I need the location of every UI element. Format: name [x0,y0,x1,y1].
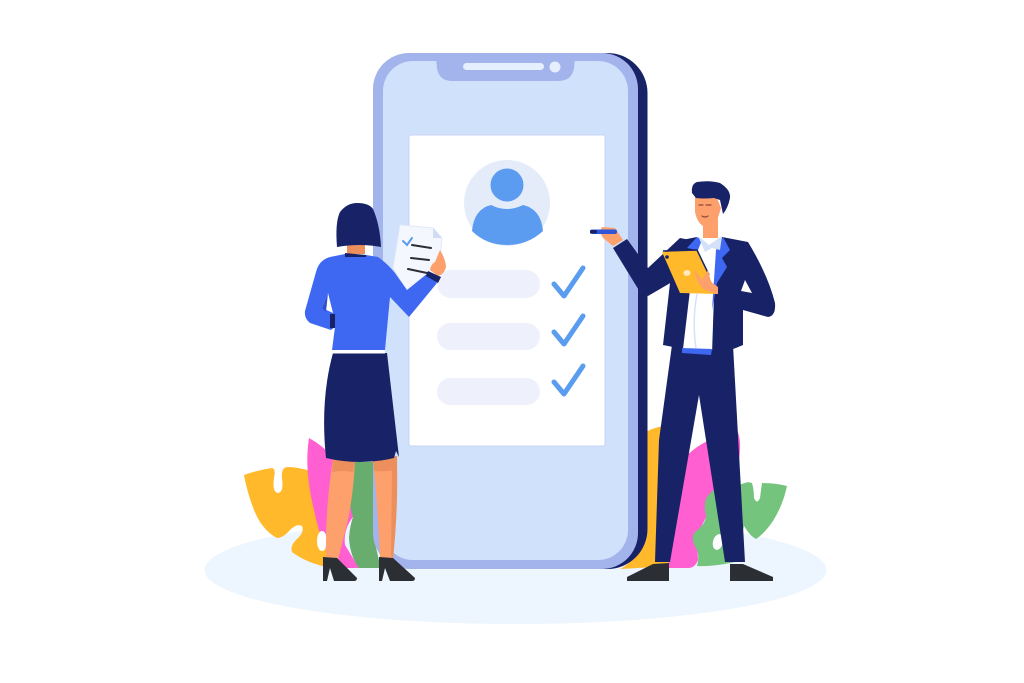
pink leaf right [668,430,740,568]
list row 3 [437,366,583,405]
yellow leaf left [244,467,345,567]
pen tip [590,230,597,234]
wrist cuff [426,271,441,283]
green leaf right [693,482,787,566]
waistband [682,348,712,355]
avatar [464,160,550,246]
neck [347,240,365,254]
tablet [662,250,718,294]
man [590,181,775,581]
avatar circle [464,160,550,246]
phone [373,53,648,569]
camera [550,62,560,72]
raised hand [601,227,623,246]
back cuff [330,314,335,328]
paper [393,225,442,291]
collar [698,236,722,252]
jacket right and arm [712,237,775,354]
left shoe [323,557,357,581]
tablet logo [684,270,690,276]
right shoe [379,557,415,581]
shirt [682,238,726,350]
paper fold [433,228,442,238]
pen [590,230,617,234]
notch [436,59,575,81]
check 1 [554,268,583,296]
ground ellipse [204,516,826,624]
check 3 [554,366,583,394]
right shoe [730,564,773,581]
sweater inner gap [322,293,333,313]
jacket left [663,237,697,349]
right plants [620,426,787,569]
pink leaf left [307,438,359,568]
hand [430,250,446,276]
blue lapel right [712,237,730,310]
avatar head [490,168,524,202]
face details [699,205,711,217]
checkmark on paper [403,238,412,245]
phone screen [383,61,628,560]
phone frame [373,53,638,569]
hair [692,181,730,214]
collar [345,253,366,257]
left shoe [627,563,669,581]
list row 1 [437,268,583,298]
arm gap [741,280,752,293]
phone back edge [560,53,648,569]
trousers [655,345,745,562]
raised arm [613,238,690,296]
skirt [324,353,399,462]
white hole in leaf [317,531,327,551]
hole in green leaf [711,533,725,551]
sleeve shade [322,293,328,312]
leg shading [332,456,397,558]
tablet edge [663,250,709,275]
hair [336,203,381,247]
profile card [409,135,605,446]
left plants [244,438,381,568]
sweater [305,254,437,350]
head [695,196,721,226]
belt [332,350,385,354]
hand on tablet [695,270,718,294]
tablet camera [665,255,669,259]
avatar body [472,205,543,245]
green leaf left [349,462,381,568]
blue lapel left [687,237,702,250]
shirt seam [694,294,697,348]
list row 2 [437,316,583,350]
yellow leaf right [620,426,672,569]
speaker [463,63,544,70]
legs [326,458,355,560]
check 2 [554,316,583,344]
neck [703,218,718,240]
woman [305,203,446,581]
paper lines [408,245,431,273]
